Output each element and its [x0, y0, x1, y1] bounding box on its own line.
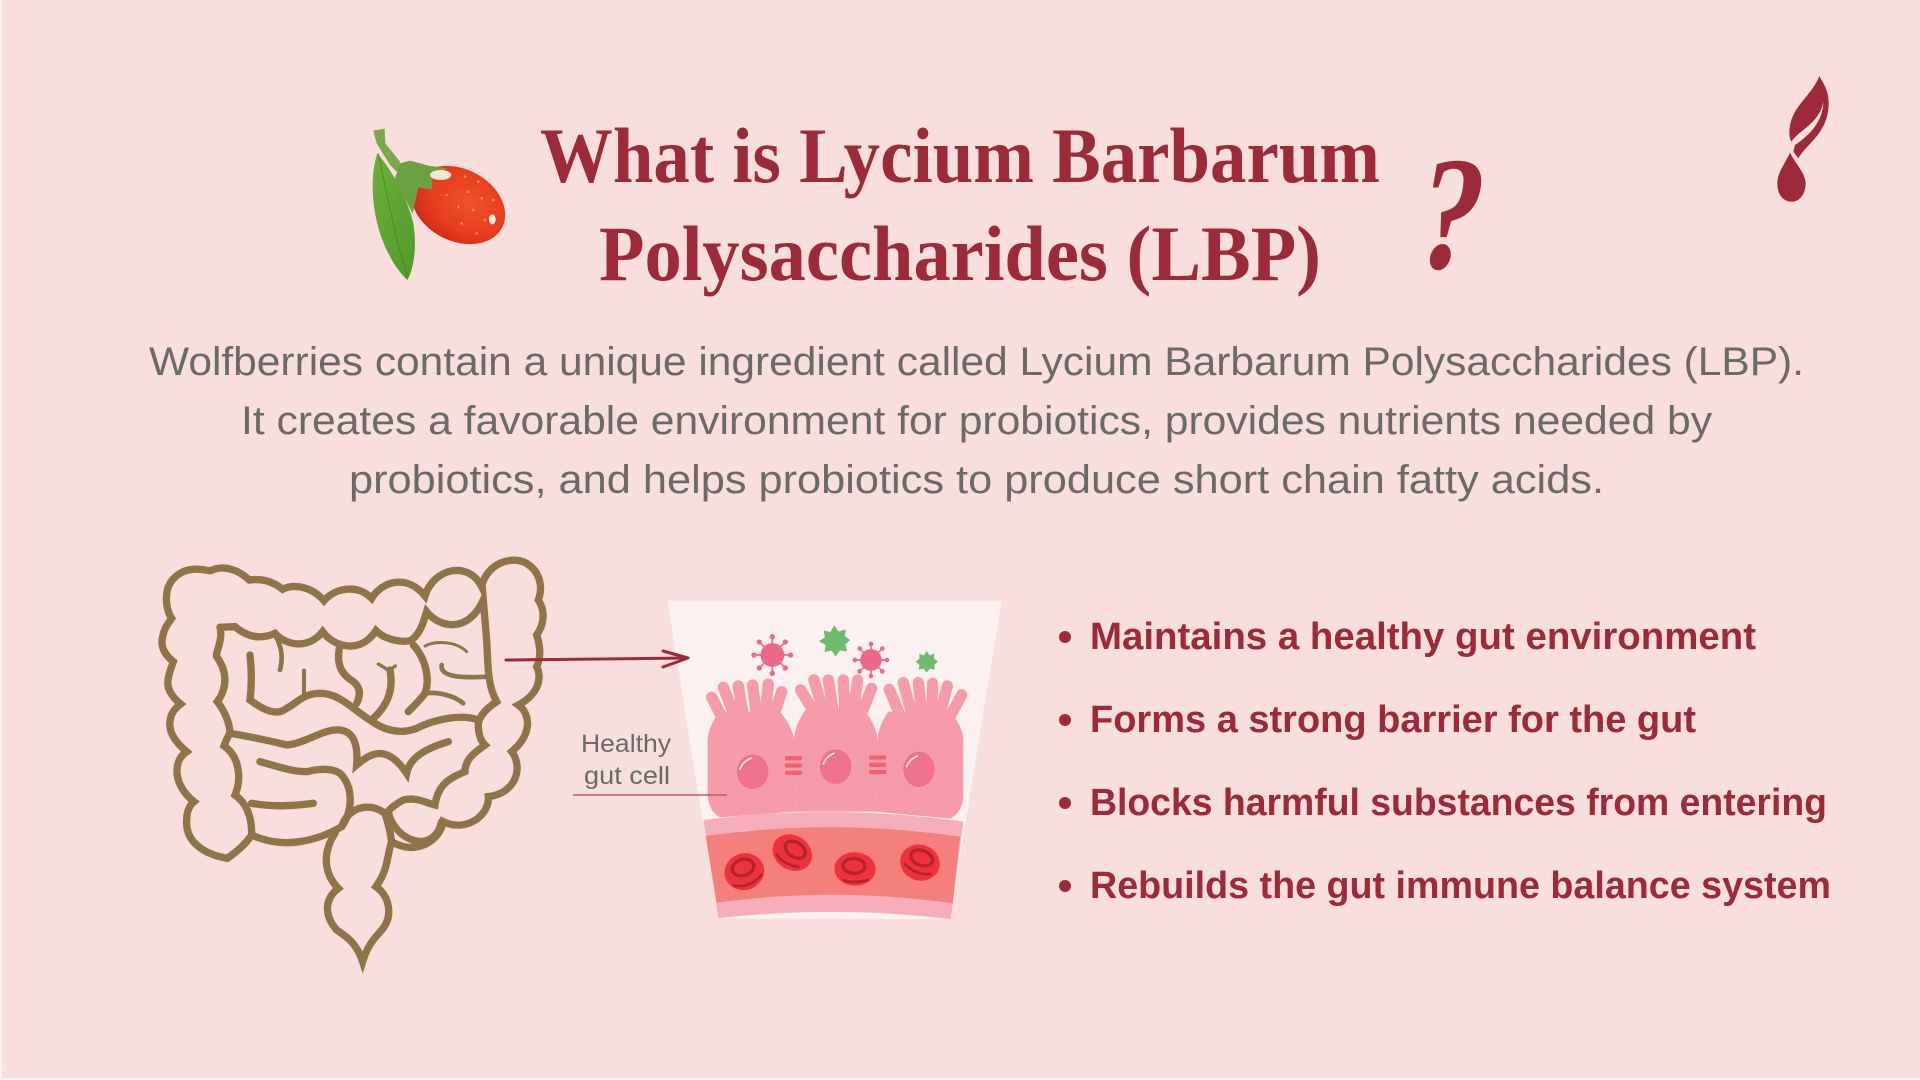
nucleus highlights: [740, 753, 917, 769]
lumen trapezoid: [667, 601, 1002, 919]
intro paragraph: Wolfberries contain a unique ingredient called Lycium Barbarum Polysaccharides (LBP).: [149, 340, 1804, 384]
cell nuclei: [737, 749, 935, 789]
vessel wall: [703, 812, 963, 919]
intro paragraph: It creates a favorable environment for probiotics, provides nutrients needed by: [241, 399, 1712, 443]
title: [540, 112, 1380, 297]
arrow: intestine to cell detail: [506, 651, 688, 667]
benefits list: [1059, 616, 1831, 907]
intro paragraph: [149, 340, 1804, 502]
benefit 3: Blocks harmful substances from entering: [1090, 782, 1827, 824]
label: healthy gut cell: gut cell: [584, 762, 670, 790]
icon: gut cell cross-section: [667, 601, 1002, 919]
blood vessel: [706, 827, 960, 903]
green bacteria: [819, 625, 938, 673]
icon: leaf and drop logo: [1777, 76, 1829, 202]
cell junctions: [785, 755, 886, 775]
benefit 4: Rebuilds the gut immune balance system: [1090, 865, 1831, 907]
title: What is Lycium Barbarum: [540, 112, 1380, 199]
label: healthy gut cell: Healthy: [581, 730, 672, 758]
question mark: ?: [1405, 125, 1499, 304]
pink virus particles: [751, 634, 889, 678]
red blood cells: [720, 827, 945, 895]
intro paragraph: probiotics, and helps probiotics to produce short chain fatty acids.: [349, 458, 1604, 502]
gut cells: [708, 680, 963, 819]
icon: intestines outline: [162, 560, 543, 962]
benefit 2: Forms a strong barrier for the gut: [1090, 699, 1696, 741]
benefit 1: Maintains a healthy gut environment: [1090, 616, 1756, 658]
icon: goji berry with leaf: [373, 129, 519, 280]
label: healthy gut cell: [573, 730, 727, 795]
title: Polysaccharides (LBP): [599, 210, 1321, 297]
